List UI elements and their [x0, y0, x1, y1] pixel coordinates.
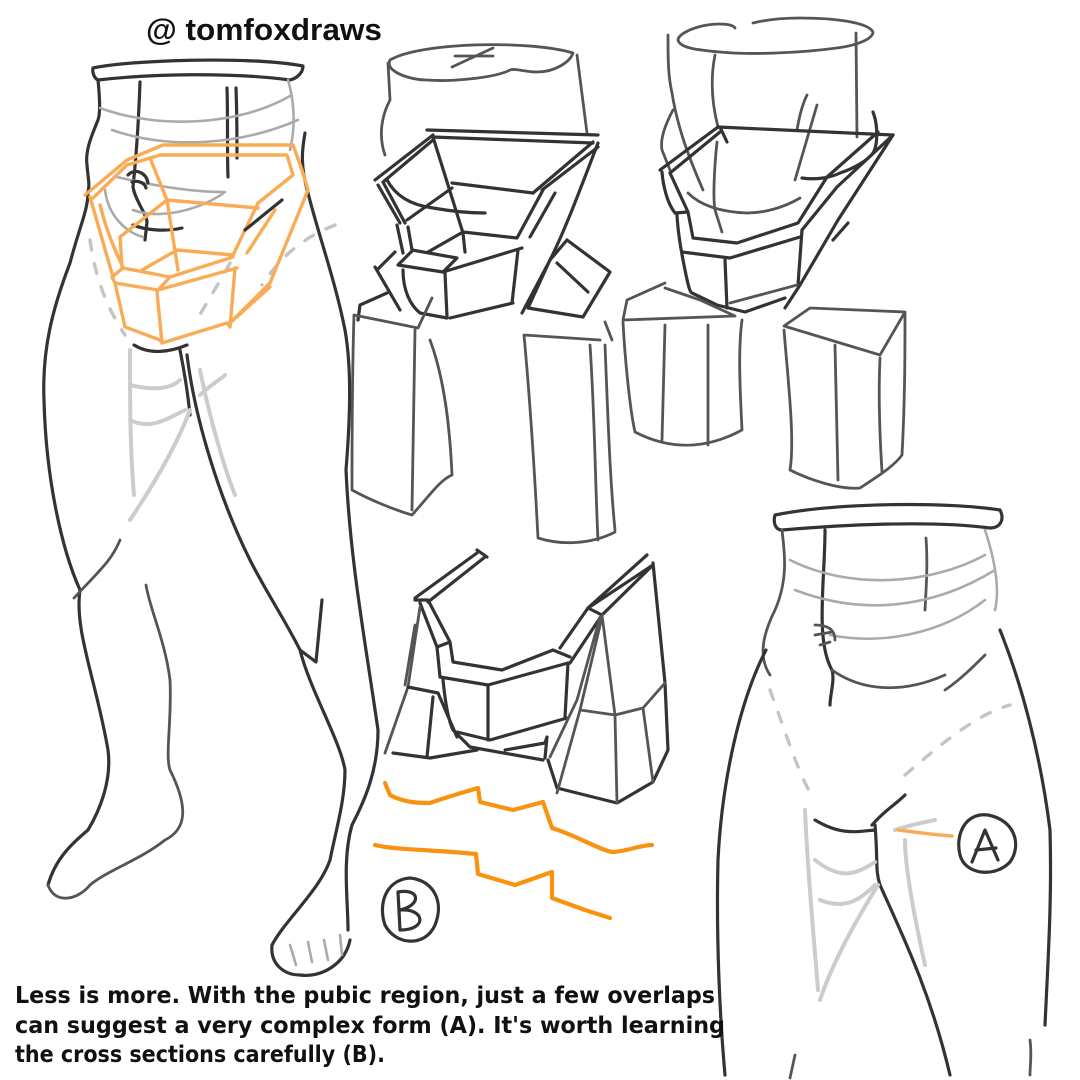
- caption text: can suggest a very complex form (A). It's worth learning: [15, 1013, 725, 1039]
- diagram: cross-section blocks: [385, 550, 668, 803]
- cross-section lines: orange: [375, 783, 652, 918]
- caption text: [15, 983, 725, 1068]
- label: B: [382, 878, 438, 941]
- diagram: middle block construction: [352, 45, 615, 543]
- diagram: upper-right block construction: [623, 18, 905, 488]
- credit: artist handle: @ tomfoxdraws: [146, 12, 382, 47]
- caption text: the cross sections carefully (B).: [15, 1042, 385, 1068]
- figure: right figure close-up: [717, 505, 1051, 1078]
- caption text: Less is more. With the pubic region, just a few overlaps: [15, 983, 715, 1009]
- callout: A with leader line: [898, 815, 1016, 872]
- orange overlay: pelvis form: [85, 145, 308, 343]
- figure: left legs with orange overlay: [44, 60, 378, 975]
